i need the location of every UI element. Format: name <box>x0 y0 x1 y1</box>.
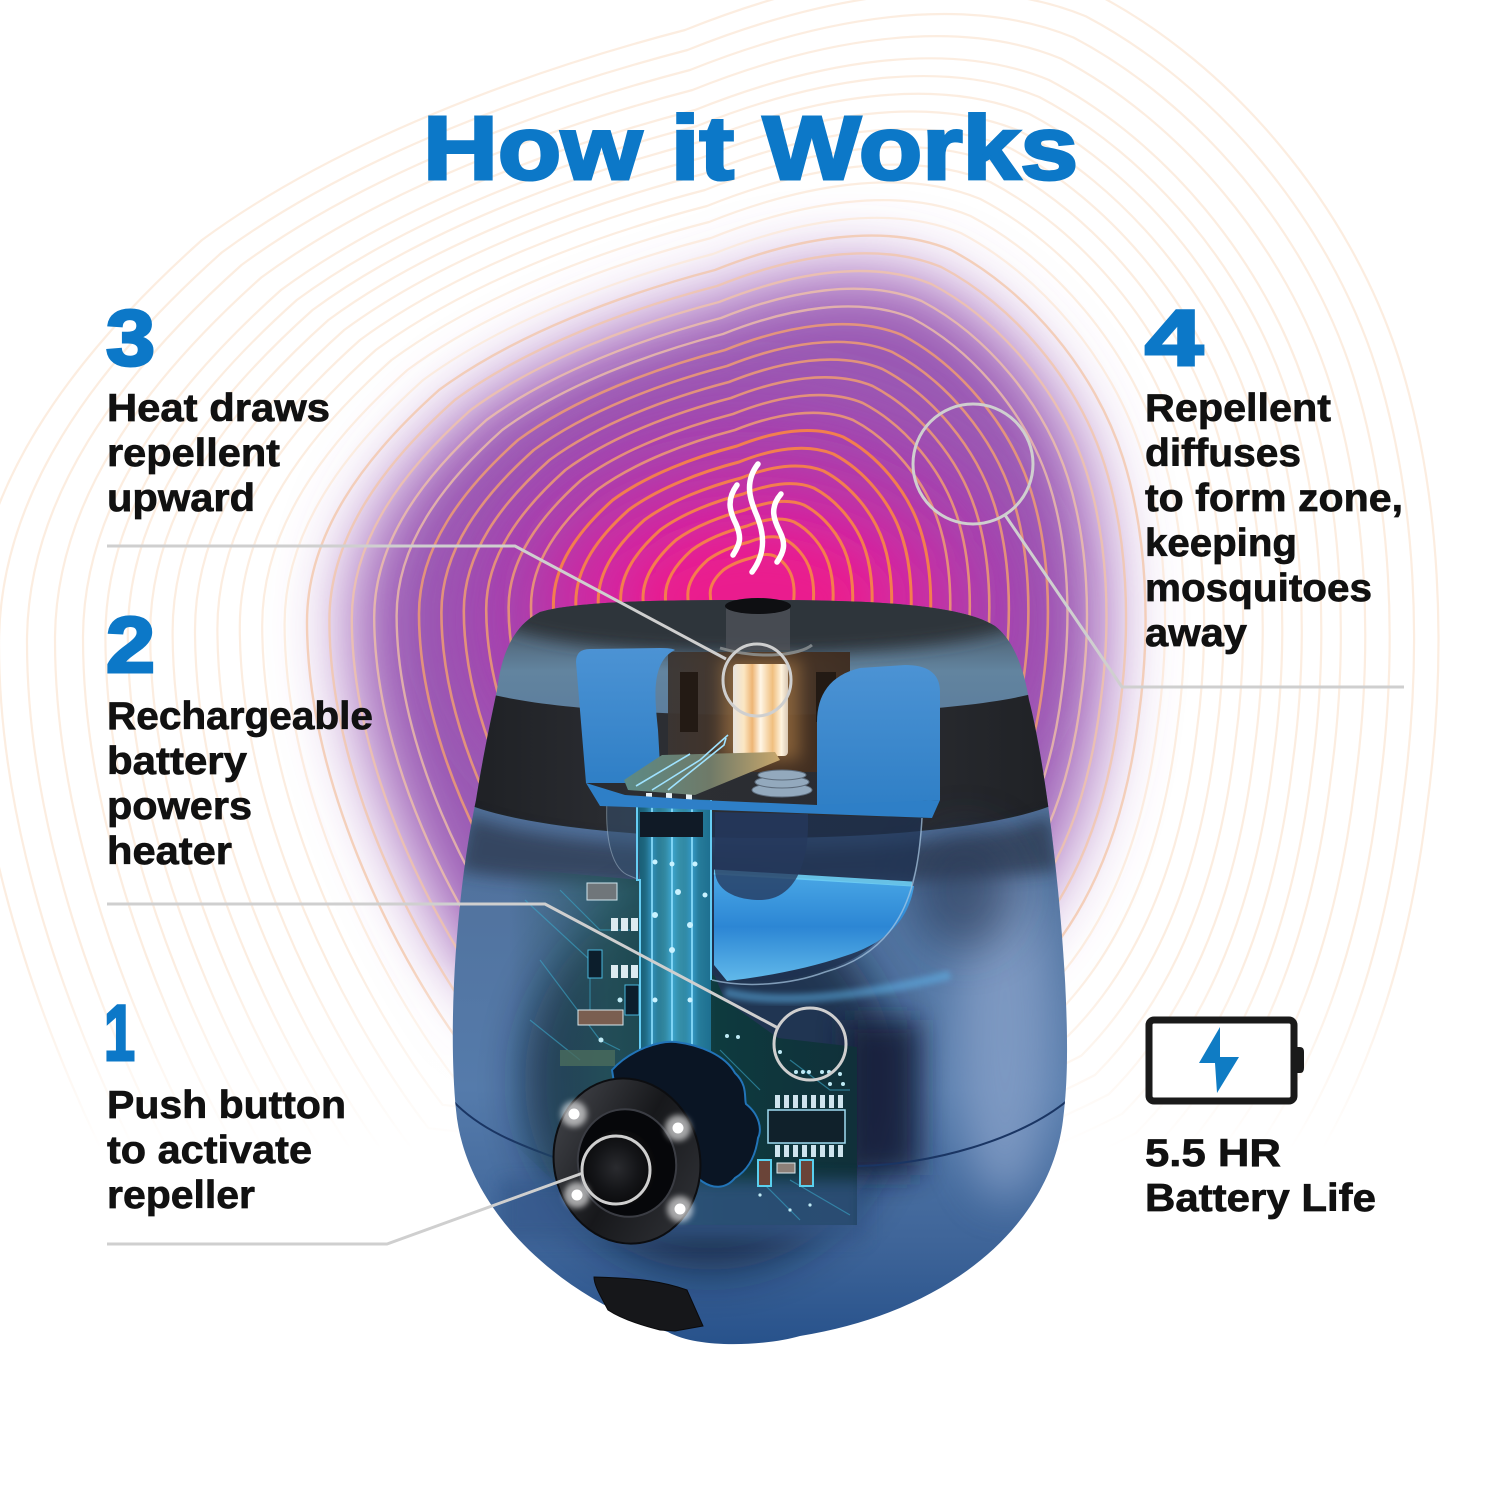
battery life text: 5.5 HR <box>1145 1132 1281 1175</box>
internal shadow behind circuit <box>525 890 895 1270</box>
step 4 text: keeping <box>1145 522 1297 565</box>
integrated circuit chip <box>758 1095 845 1186</box>
circuit board <box>500 868 865 1240</box>
blue reservoir right <box>817 665 940 807</box>
step 3 text: upward <box>107 477 255 520</box>
step 4 text <box>1145 293 1403 655</box>
callout 3 leader line and heater circle <box>107 546 791 716</box>
callout 4 leader line and zone circle <box>913 404 1404 687</box>
glow halo <box>722 660 800 760</box>
reservoir bowl with repellent liquid <box>607 800 950 999</box>
steam icon <box>730 464 784 572</box>
push button with LED ring <box>538 1042 760 1257</box>
step 3 text: Heat draws <box>107 387 330 430</box>
step 3 text: 3 <box>106 293 155 382</box>
SMD components <box>560 883 639 1066</box>
step 1 text: 1 <box>104 988 135 1077</box>
step 2 text: 2 <box>106 600 155 689</box>
battery life text <box>1145 1132 1376 1220</box>
step 3 text: repellent <box>107 432 280 475</box>
step 4 text: 4 <box>1145 293 1203 382</box>
shadow right of bowl <box>915 830 1015 950</box>
title: How it Works <box>423 99 1078 199</box>
callout 2 leader line and circuit circle <box>107 904 846 1080</box>
battery life text: Battery Life <box>1145 1177 1376 1220</box>
board dots <box>598 998 845 1212</box>
step 1 text: repeller <box>107 1174 255 1217</box>
heater stem <box>726 606 790 650</box>
step 4 text: mosquitoes <box>1145 567 1372 610</box>
upper internal chamber <box>576 598 940 818</box>
shadow right of circuit <box>845 1020 920 1175</box>
device body shell <box>440 595 1080 1355</box>
icon: battery <box>1149 1020 1304 1101</box>
step 4 text: to form zone, <box>1145 477 1403 520</box>
board traces <box>525 890 850 1220</box>
step 4 text: away <box>1145 612 1247 655</box>
step 4 text: diffuses <box>1145 432 1301 475</box>
step 2 text: Rechargeable <box>107 695 373 738</box>
blue reservoir left <box>576 648 675 783</box>
step 1 text: Push button <box>107 1084 346 1127</box>
right side highlight <box>955 860 1055 1200</box>
step 4 text: Repellent <box>1145 387 1331 430</box>
coil <box>752 770 812 797</box>
step 2 text <box>106 600 373 873</box>
step 1 text: to activate <box>107 1129 312 1172</box>
step 2 text: heater <box>107 830 232 873</box>
step 3 text <box>106 293 330 520</box>
base seam <box>452 1100 1068 1166</box>
step 1 text <box>104 988 346 1217</box>
step 2 text: battery <box>107 740 247 783</box>
product: cutaway repeller device <box>440 570 1080 1355</box>
band lower shadow <box>458 815 1060 885</box>
glowing heater cylinder <box>733 664 788 756</box>
vertical circuit strip with glowing traces <box>636 793 711 1062</box>
charging port <box>594 1277 703 1331</box>
callout 1 leader line and button circle <box>107 1136 650 1244</box>
dark band <box>462 694 1060 838</box>
blue platform <box>586 783 940 818</box>
cap top dark shade <box>512 600 1006 662</box>
heater circuit board <box>624 752 780 795</box>
step 2 text: powers <box>107 785 252 828</box>
LEDs <box>561 1101 693 1222</box>
